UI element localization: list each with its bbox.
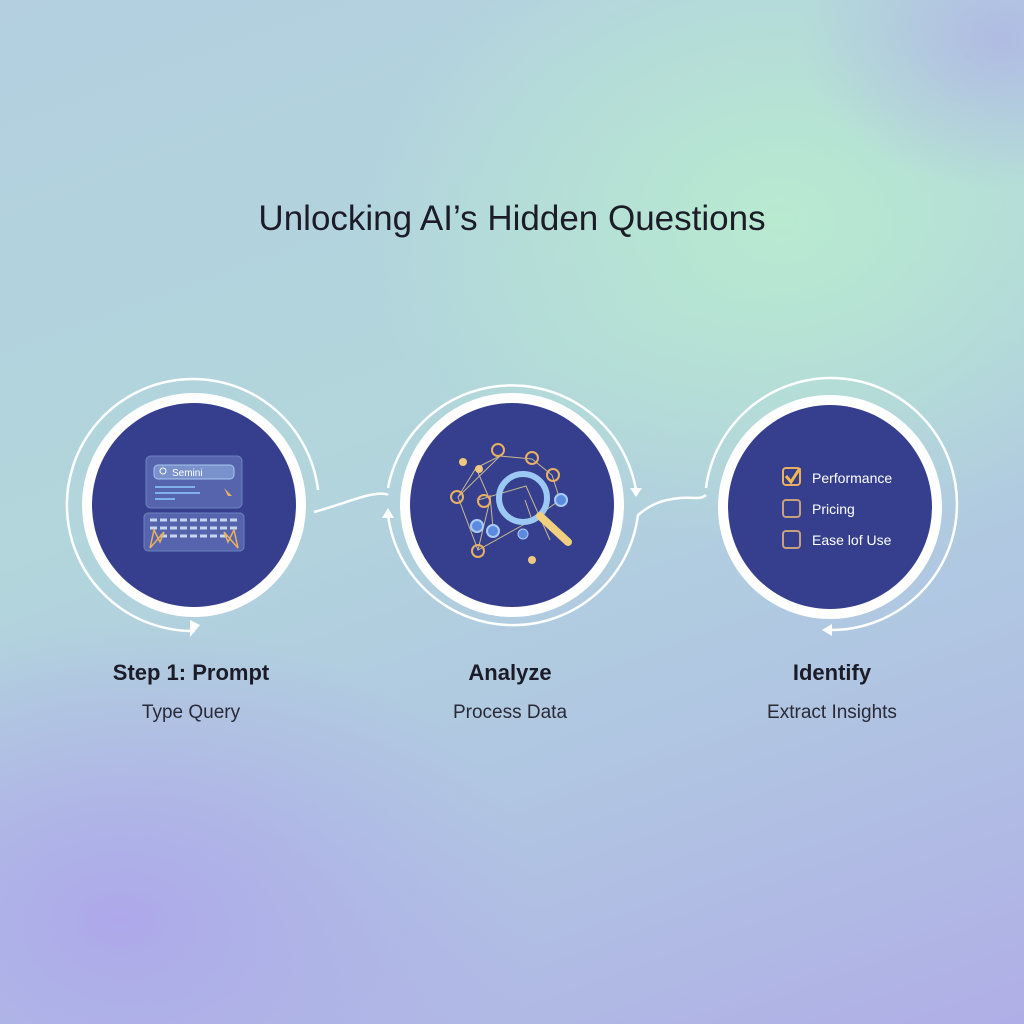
step 3 label: Identify [793,660,871,685]
icon: browser and keyboard [144,456,244,551]
title: Unlocking AI’s Hidden Questions [258,199,766,238]
icon: checklist [783,468,892,548]
step circles [82,393,942,619]
step 3 label: Extract Insights [767,702,897,723]
step 2 label: Analyze [468,660,552,685]
step 3 label [767,660,897,723]
step 1 label [113,660,269,723]
icon: checklist: Ease lof Use [812,532,892,548]
icon: checklist: Performance [812,470,892,486]
icon: checklist: Pricing [812,501,855,517]
step 1 label: Step 1: Prompt [113,660,269,685]
connectors and arcs [67,378,957,631]
step 2 label: Process Data [453,702,567,723]
icon: network with magnifier [451,444,568,564]
step 2 label [453,660,568,723]
step 1 label: Type Query [142,702,240,723]
icon: browser and keyboard: Semini [172,468,203,479]
